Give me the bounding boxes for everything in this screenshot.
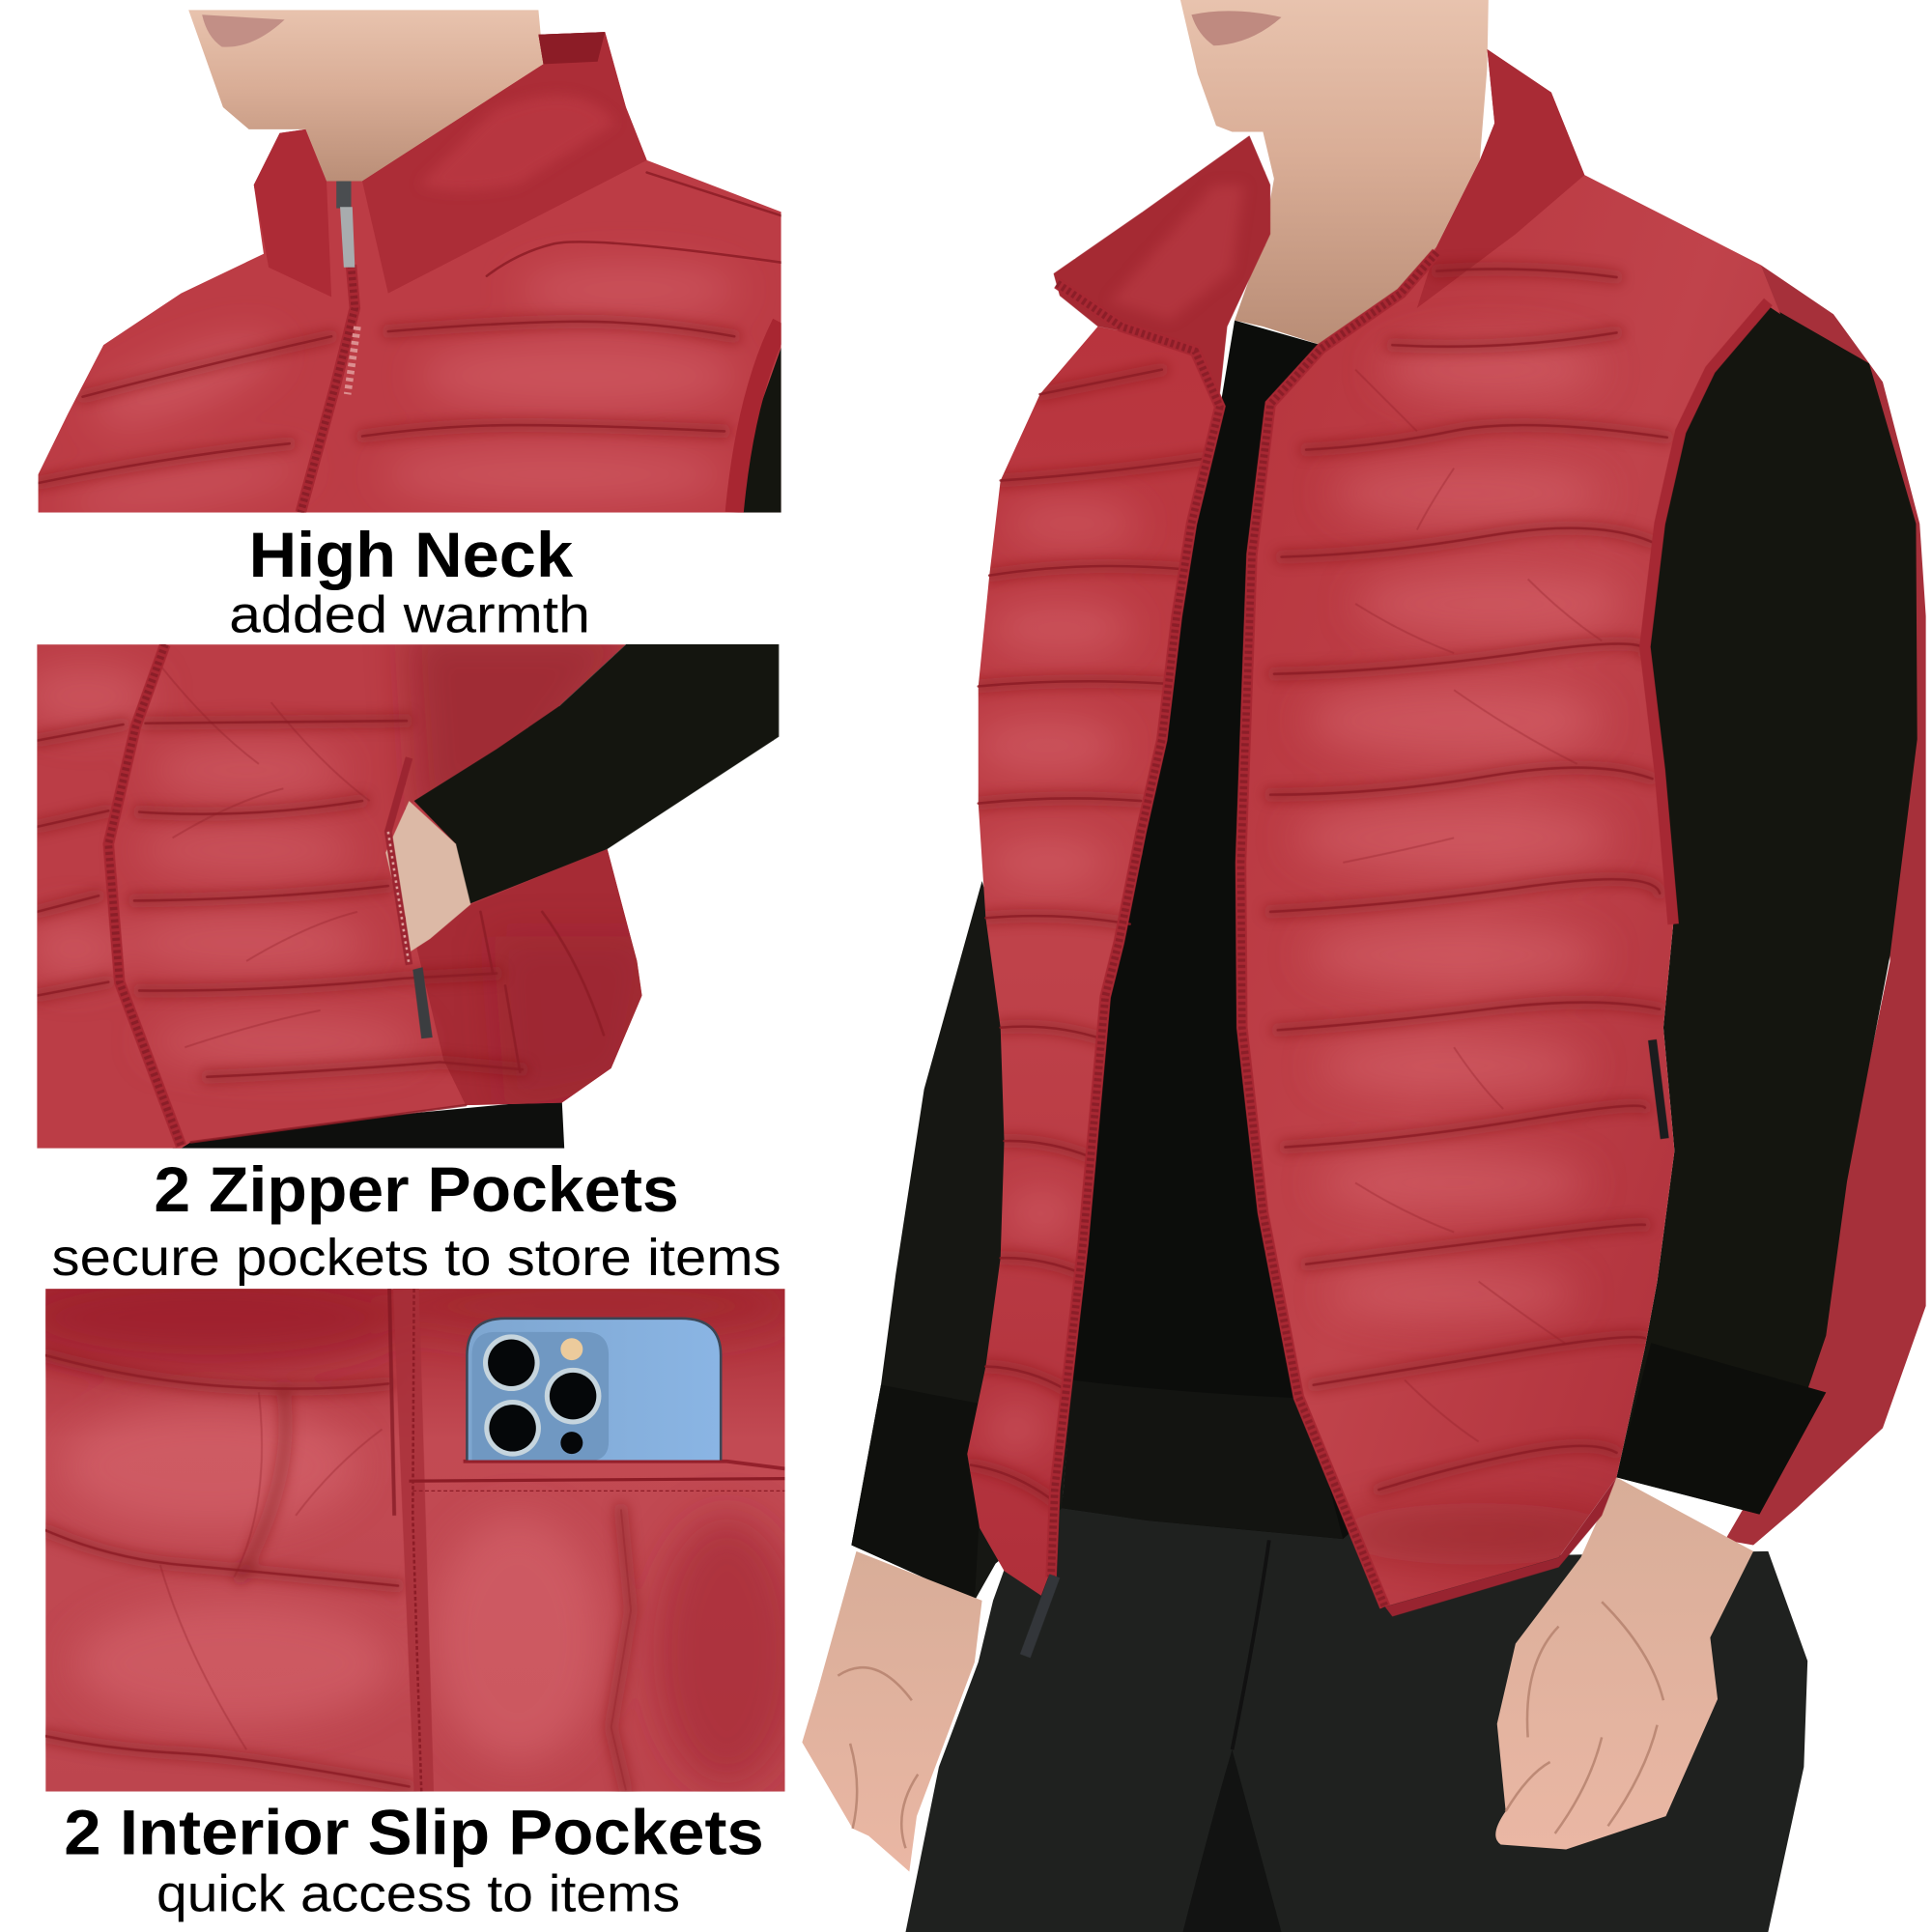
main photo: man wearing vest: [412, 0, 1926, 1932]
heading: 2 interior slip pockets: 2 Interior Slip Pockets: [64, 1798, 764, 1869]
armhole band: [734, 323, 781, 513]
pocket zipper: [388, 757, 409, 965]
pants and waistband: [173, 1099, 564, 1149]
heading: high neck: High Neck: [249, 520, 573, 591]
seams on left front: [971, 370, 1207, 1502]
vest hem: [1385, 1477, 1616, 1616]
front zipper: [108, 644, 182, 1146]
main zipper pull: [1025, 1576, 1055, 1656]
fabric shading: [18, 629, 653, 1109]
pants: [906, 1497, 1807, 1932]
caption: secure pockets: secure pockets to store items: [52, 1230, 781, 1287]
phone: [466, 1318, 722, 1460]
black sleeve: [743, 348, 781, 513]
collar right side: [1417, 49, 1584, 308]
pocket zipper pull: [412, 967, 433, 1038]
vest fabric: [45, 1289, 785, 1792]
zipper pull: [336, 182, 355, 268]
left front of vest: [967, 327, 1220, 1596]
vest body: [39, 32, 781, 513]
hand in pocket: [385, 801, 470, 952]
right hand: [1495, 1477, 1753, 1850]
shading on left front: [971, 370, 1207, 1502]
panel: zipper pockets photo: [37, 644, 779, 1149]
pocket opening: [409, 1462, 784, 1491]
vest back: [1725, 265, 1926, 1545]
inside of left collar: [1054, 135, 1270, 394]
caption: added warmth: added warmth: [229, 586, 590, 643]
shirt hem: [1062, 1380, 1343, 1539]
quilting seams: [37, 666, 604, 1142]
left zipper: [1051, 283, 1220, 1577]
quilting seams: [45, 1355, 631, 1790]
right front of vest: [1240, 49, 1780, 1616]
lips: [1191, 11, 1282, 45]
shading on right front: [1270, 269, 1667, 1565]
vest body: [37, 644, 642, 1149]
placket strip: [389, 1289, 434, 1792]
left sleeve: [851, 881, 1084, 1601]
right sleeve: [1616, 301, 1918, 1515]
camera module: [472, 1332, 609, 1460]
face and neck: [1180, 0, 1489, 345]
seams on right front: [1270, 269, 1667, 1490]
seam shadows: [45, 1355, 631, 1790]
collar shading: [254, 32, 647, 297]
soft fabric highlights: [39, 265, 739, 526]
zipper: [300, 265, 357, 513]
lips: [202, 14, 285, 47]
panel: high neck photo: [39, 10, 781, 513]
fabric shading: [13, 1269, 801, 1786]
right zipper: [1240, 252, 1436, 1606]
black shirt: [1062, 321, 1355, 1539]
heading: 2 zipper pockets: 2 Zipper Pockets: [154, 1154, 679, 1226]
quilting seams: [39, 173, 781, 483]
collar highlight: [1109, 185, 1244, 321]
panel: interior slip pockets photo: [45, 1289, 784, 1792]
left hand: [802, 1551, 982, 1872]
armhole band: [1645, 301, 1768, 924]
caption: quick access: quick access to items: [156, 1865, 680, 1922]
face and neck: [188, 10, 543, 185]
black sleeve: [414, 644, 779, 904]
pocket zipper pull: [1652, 1040, 1664, 1139]
